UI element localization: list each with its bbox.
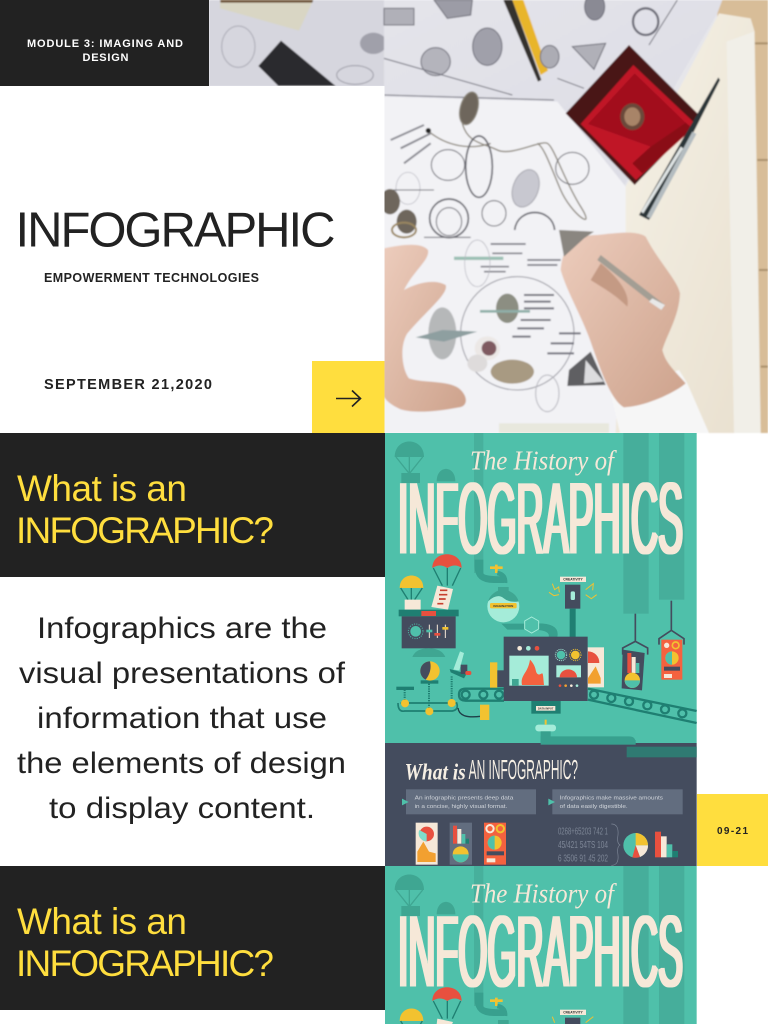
heading two: INFOGRAPHIC? <box>16 943 274 984</box>
hanging bar chart card <box>622 614 648 690</box>
dark teal tab <box>541 740 697 757</box>
second poster faucet <box>490 998 509 1024</box>
number scribbles: 0268+65203 742 1 <box>558 827 608 838</box>
callout left: An infographic presents deep data <box>415 796 513 802</box>
pen in hand <box>559 230 665 310</box>
poster dark panel: what is an infographic: AN INFOGRAPHIC? <box>469 754 578 785</box>
mini poster slate <box>450 823 472 865</box>
hand crease shadow <box>591 263 628 307</box>
number scribbles <box>558 827 608 865</box>
mini poster cream <box>416 823 438 865</box>
definition text: visual presentations of <box>19 657 346 690</box>
lower sheet <box>384 97 626 433</box>
number scribbles: 6 3506 91 45 202 <box>558 854 608 865</box>
definition text <box>17 612 346 825</box>
arrow icon <box>336 390 360 406</box>
heading two: What is an <box>17 901 187 942</box>
heading one: What is an <box>17 468 187 509</box>
panel heading script: What is <box>405 759 466 785</box>
heading one: INFOGRAPHIC? <box>16 510 274 551</box>
conveyor belt <box>459 689 697 723</box>
pipe under machine <box>535 720 636 743</box>
poster: history of infographics <box>385 433 697 743</box>
second poster, repeated and cropped by the page <box>385 866 697 1024</box>
callout left: in a concise, highly visual format. <box>415 804 507 810</box>
callout right: of data easily digestible. <box>560 804 628 810</box>
date tab text: 09-21 <box>717 826 748 837</box>
faded parachute <box>395 441 455 483</box>
date: SEPTEMBER 21,2020 <box>44 377 212 393</box>
definition text: information that use <box>37 702 327 735</box>
yellow arrow button <box>312 361 384 433</box>
drawing hand <box>561 233 686 407</box>
mini poster red <box>484 823 506 865</box>
second faded parachute <box>395 874 455 916</box>
poster background <box>385 433 697 743</box>
sleeve <box>611 370 709 433</box>
heading panel one <box>0 433 385 577</box>
poster script title: The History of <box>470 446 617 476</box>
silver pen <box>639 77 720 220</box>
pie chart <box>623 833 648 858</box>
paper roll light edge <box>727 32 761 433</box>
callout left <box>402 789 536 814</box>
definition text: the elements of design <box>17 747 346 780</box>
callout right <box>548 789 683 814</box>
heading panel two <box>0 866 385 1010</box>
definition text: Infographics are the <box>37 612 327 645</box>
central machine: DATA INPUT <box>538 707 554 711</box>
number scribbles: 45/421 54TS 104 <box>558 840 608 851</box>
definition text: to display content. <box>49 792 315 825</box>
ring sketches <box>391 125 589 390</box>
poster dark panel: what is an infographic <box>385 740 697 866</box>
brace <box>611 824 620 865</box>
pendant necklace <box>426 90 586 219</box>
spring levers and pie <box>396 651 489 720</box>
poster on belt <box>587 647 604 687</box>
upper sheets <box>384 0 722 187</box>
faucet and flask <box>487 565 558 637</box>
left hand <box>384 245 466 412</box>
module label line two: DESIGN <box>82 52 129 64</box>
photo: desk, sheets, hands <box>380 0 768 433</box>
photo strip: desk at top left <box>209 0 387 86</box>
module label box <box>0 0 209 86</box>
second poster creativity sign <box>552 1010 593 1024</box>
pencils <box>503 0 548 82</box>
hanging red card <box>659 601 684 680</box>
creativity sign and device <box>549 577 597 637</box>
date tab <box>697 794 768 866</box>
second poster script title: The History of <box>470 879 617 909</box>
photo: jewellery designer sketching <box>209 0 768 433</box>
sample rings on paper <box>380 189 417 237</box>
faucet and flask: IMAGINATION <box>493 604 513 608</box>
title: INFOGRAPHIC <box>16 204 336 258</box>
module label: MODULE 3: IMAGING AND <box>27 38 183 50</box>
gem sketches <box>416 294 609 433</box>
creativity sign and device: CREATIVITY <box>563 578 584 582</box>
second poster background <box>385 866 697 1024</box>
second poster creativity sign: CREATIVITY <box>563 1011 584 1015</box>
subtitle: EMPOWERMENT TECHNOLOGIES <box>44 271 259 285</box>
cream paper roll <box>611 13 761 433</box>
red and yellow parachutes with data box <box>399 554 462 657</box>
wood desk <box>717 0 768 433</box>
red ring box <box>566 45 701 185</box>
title panel <box>0 86 384 433</box>
second poster parachutes <box>400 987 462 1024</box>
bar chart <box>655 832 678 857</box>
top sheet sketches <box>384 0 677 100</box>
yellow block <box>490 662 497 688</box>
callout right: Infographics make massive amounts <box>560 796 663 802</box>
central machine <box>497 637 588 714</box>
